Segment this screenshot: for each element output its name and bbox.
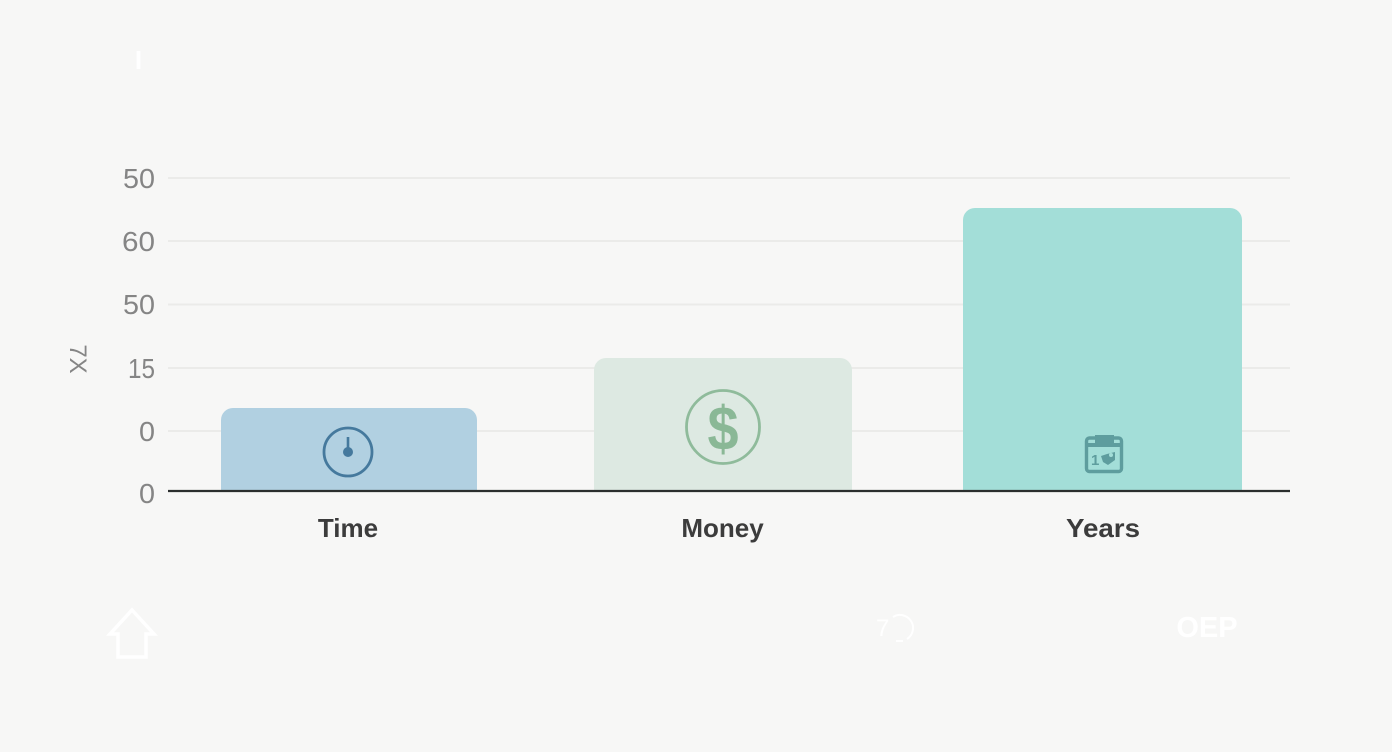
icon: dollar coin: $: [707, 395, 739, 464]
y-axis tick labels: [122, 163, 155, 509]
y-axis title: 7X: [64, 344, 91, 374]
faint white icon: circular glyph: 7: [876, 615, 889, 642]
y-axis tick labels: 0: [139, 478, 155, 509]
icon: calendar: [1086, 435, 1122, 472]
y-axis tick labels: 50: [123, 289, 155, 320]
faint white text: OEP: OEP: [1176, 612, 1238, 644]
bar: Money: [594, 358, 852, 491]
category labels: Time: [318, 513, 378, 543]
faint white mark: top: I: [135, 45, 142, 75]
y-axis tick labels: 60: [122, 226, 155, 257]
category labels: Years: [1066, 513, 1140, 543]
category labels: Money: [681, 513, 764, 543]
faint white icon: circular glyph: [876, 615, 913, 642]
y-axis tick labels: 50: [123, 163, 155, 194]
icon: clock: [324, 428, 372, 476]
icon: dollar coin: [686, 390, 760, 464]
icon: calendar: 1: [1091, 452, 1099, 469]
bar: Years: [963, 208, 1242, 491]
faint white icon: house arrow: [110, 610, 154, 657]
y-axis tick labels: 15: [128, 353, 155, 384]
x-axis baseline: [168, 490, 1290, 492]
bar: Time: [221, 408, 477, 491]
y-axis tick labels: 0: [139, 416, 155, 447]
category labels: [318, 513, 1140, 543]
